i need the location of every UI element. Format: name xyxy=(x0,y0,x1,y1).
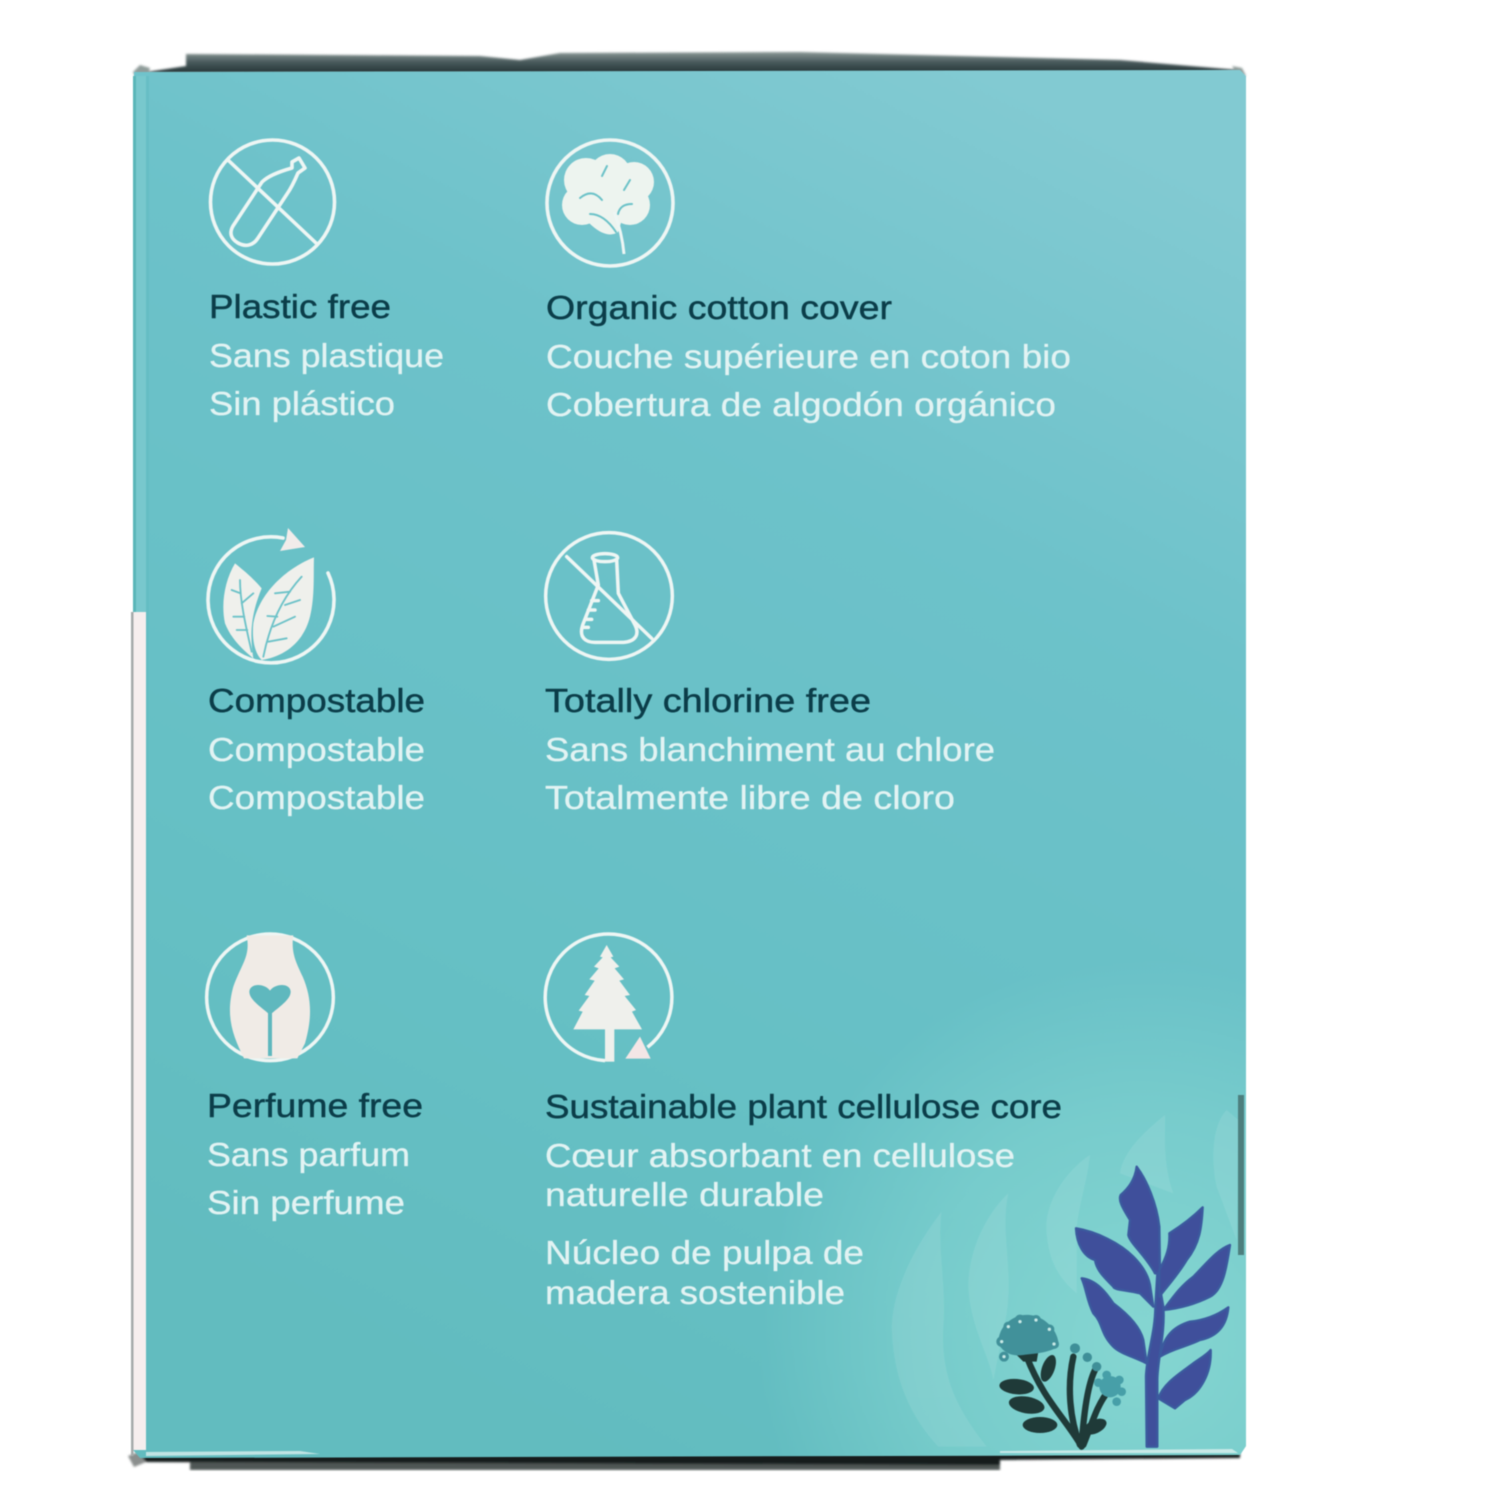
text: organic cotton cover: Organic cotton cover xyxy=(546,289,892,326)
text: perfume free xyxy=(207,1087,423,1221)
bottom edge highlight xyxy=(146,1449,1238,1456)
dark strip on right edge xyxy=(1238,1095,1244,1255)
text: organic cotton cover: Couche supérieure en coton bio xyxy=(546,338,1071,375)
icon: sustainable tree xyxy=(545,934,672,1062)
box front panel xyxy=(131,70,1246,1458)
left side strip xyxy=(131,76,149,1456)
text: perfume free: Sans parfum xyxy=(207,1136,410,1173)
buds xyxy=(1070,1343,1101,1371)
teal flower large xyxy=(996,1315,1059,1362)
large blue leaves xyxy=(1076,1167,1230,1447)
text: perfume free: Sin perfume xyxy=(207,1184,405,1221)
text: organic cotton cover: Cobertura de algodón orgánico xyxy=(546,386,1056,423)
background pale wisps xyxy=(892,1110,1238,1447)
icon: no chlorine flask xyxy=(546,533,672,659)
text: sustainable plant cellulose core: naturelle durable xyxy=(545,1176,824,1213)
icon: no plastic bottle xyxy=(210,140,334,264)
text: plastic free: Sin plástico xyxy=(209,385,395,422)
light corner tint xyxy=(832,1039,1246,1456)
small dark plant xyxy=(996,1315,1126,1447)
text: perfume free: Perfume free xyxy=(207,1087,423,1124)
text: compostable: Compostable xyxy=(208,779,425,816)
text: sustainable plant cellulose core: Cœur absorbant en cellulose xyxy=(545,1137,1015,1174)
text: compostable: Compostable xyxy=(208,731,425,768)
teal flower small xyxy=(1094,1371,1126,1406)
text: plastic free: Sans plastique xyxy=(209,337,444,374)
text: compostable xyxy=(208,682,425,816)
box top edge xyxy=(133,52,1246,78)
text: totally chlorine free xyxy=(545,682,995,816)
text: sustainable plant cellulose core xyxy=(545,1088,1062,1311)
plant illustration xyxy=(892,1110,1238,1447)
icon: perfume free body xyxy=(207,934,333,1061)
text: totally chlorine free: Sans blanchiment au chlore xyxy=(545,731,995,768)
text: totally chlorine free: Totalmente libre de cloro xyxy=(545,779,955,816)
text: plastic free: Plastic free xyxy=(209,288,391,325)
text: compostable: Compostable xyxy=(208,682,425,719)
heart cut-out xyxy=(249,985,291,1056)
icon: compostable leaves xyxy=(208,528,334,663)
text: totally chlorine free: Totally chlorine free xyxy=(545,682,871,719)
box bottom edge xyxy=(128,1452,1240,1470)
icon: cotton boll xyxy=(547,140,673,266)
text: sustainable plant cellulose core: Sustainable plant cellulose core xyxy=(545,1088,1062,1125)
text: organic cotton cover xyxy=(546,289,1071,423)
text: sustainable plant cellulose core: Núcleo de pulpa de xyxy=(545,1234,864,1271)
text: plastic free xyxy=(209,288,444,422)
text: sustainable plant cellulose core: madera sostenible xyxy=(545,1274,845,1311)
